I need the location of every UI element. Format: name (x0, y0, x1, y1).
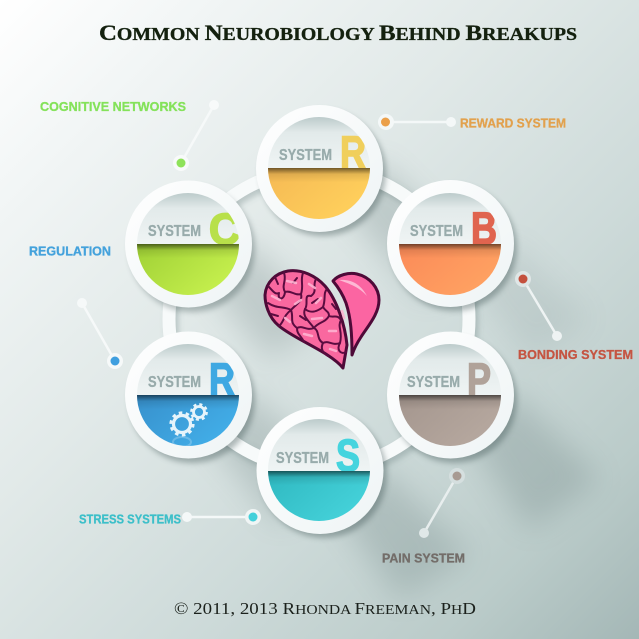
panel: bonding system circle (387, 180, 517, 311)
icon: gears (171, 404, 206, 447)
panel: cognitive networks circle: SYSTEM (148, 223, 201, 240)
panel: stress systems circle: S (336, 430, 360, 481)
callout: pain system (382, 468, 465, 566)
callout: reward system: REWARD SYSTEM (460, 116, 566, 130)
panel: pain system circle: SYSTEM (407, 374, 460, 391)
panel: reward system circle (256, 105, 386, 236)
callout: reward system (378, 114, 566, 130)
callout: stress systems: STRESS SYSTEMS (79, 512, 181, 526)
panel: regulation circle: R (209, 354, 235, 405)
title: COMMON NEUROBIOLOGY BEHIND BREAKUPS (99, 20, 577, 45)
panel: bonding system circle: SYSTEM (410, 223, 463, 240)
icon: brain and heart (265, 271, 379, 368)
panel: stress systems circle: SYSTEM (276, 450, 329, 467)
callout: cognitive networks: COGNITIVE NETWORKS (40, 99, 186, 114)
panel: pain system circle (387, 332, 517, 463)
callout: cognitive networks (40, 99, 219, 171)
brain folds (268, 273, 346, 356)
panel: cognitive networks circle (125, 180, 255, 312)
callout: bonding system: BONDING SYSTEM (518, 347, 633, 362)
connecting ring (169, 169, 472, 473)
copyright credit: © 2011, 2013 R HONDA FREEMAN , PHD (174, 599, 476, 618)
panel: bonding system circle: B (471, 203, 497, 254)
panel: pain system circle: P (467, 354, 491, 405)
callout: regulation: REGULATION (29, 244, 111, 258)
panel: reward system circle: R (340, 127, 366, 178)
panel: regulation circle (125, 332, 255, 463)
panel: regulation circle: SYSTEM (148, 374, 201, 391)
panel: stress systems circle (256, 407, 387, 538)
panel: reward system circle: SYSTEM (279, 147, 332, 164)
panel: cognitive networks circle: C (209, 205, 240, 254)
callout: pain system: PAIN SYSTEM (382, 550, 465, 566)
callout: bonding system (515, 271, 633, 362)
callout: stress systems (79, 509, 261, 526)
callout: regulation (29, 244, 123, 369)
